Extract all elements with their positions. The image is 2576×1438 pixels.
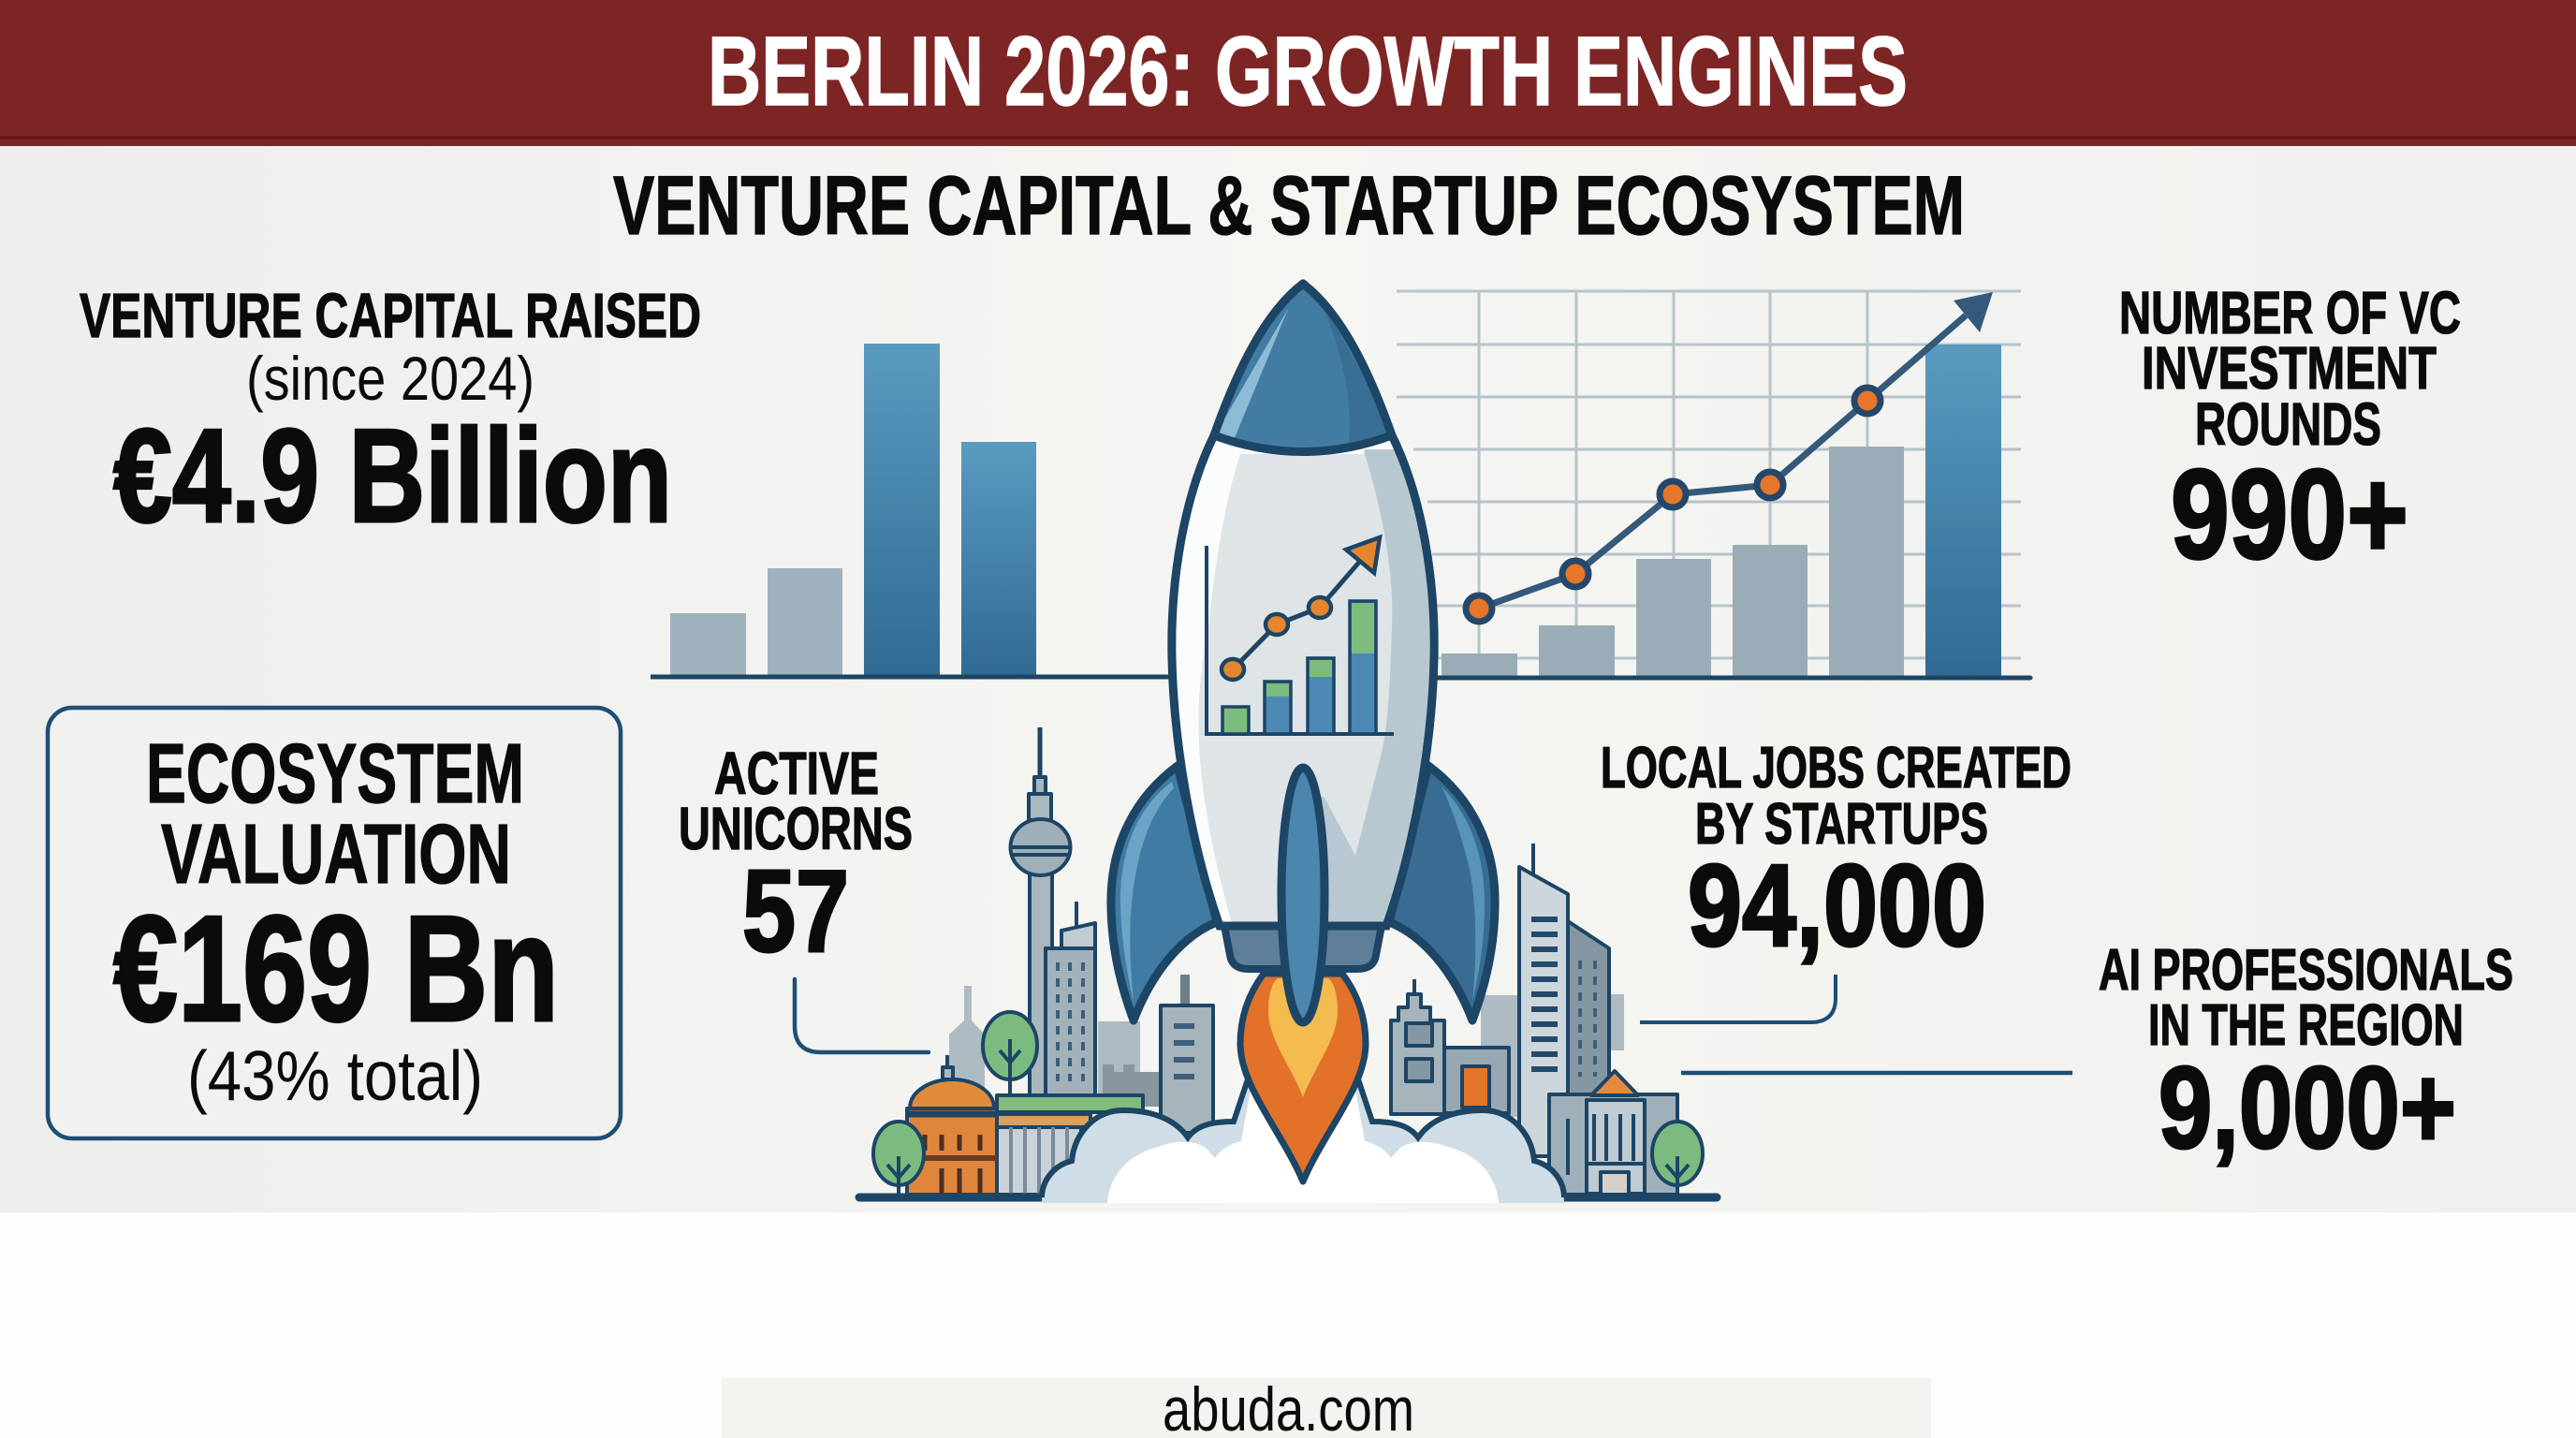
label: number of vc investment rounds: NUMBER OF VC [2119,279,2461,346]
title banner [0,0,2576,146]
right growth chart [1397,291,2030,678]
label: ai professionals in the region: IN THE REGION [2148,993,2464,1058]
connector: ai [1681,1071,2072,1075]
colonnade building [997,1095,1143,1195]
orange domed building [907,1055,997,1195]
rocket nose cone [1214,281,1404,451]
city skyline [859,727,1717,1197]
label: number of vc investment rounds: INVESTMENT [2142,334,2437,402]
label: venture capital raised: VENTURE CAPITAL RAISED [80,281,701,351]
stat: number of vc rounds [2119,279,2461,585]
tall right building [1519,844,1609,1156]
tree: right [1652,1122,1703,1197]
footer band [722,1374,1931,1438]
label: number of vc investment rounds [2119,279,2461,458]
value: 57: 57 [742,847,849,976]
chart bars [1442,345,2001,678]
rocket [1111,281,1495,1181]
panel: ecosystem valuation [48,708,621,1138]
value: 169 bn: €169 Bn [113,885,559,1053]
tree: lower left [873,1122,924,1197]
label: local jobs created by startups: LOCAL JOBS CREATED [1601,736,2071,800]
tv tower [1011,727,1071,1097]
value: 4.9 billion: €4.9 Billion [113,402,672,550]
subtitle: VENTURE CAPITAL & STARTUP ECOSYSTEM [613,158,1965,252]
label: active unicorns [679,740,913,862]
right low buildings [1391,979,1509,1114]
background silhouettes [949,986,1624,1117]
stat: ai professionals [2099,938,2513,1173]
label: local jobs created by startups: BY STARTUPS [1695,792,1988,857]
label: active unicorns: ACTIVE [714,740,879,807]
mini chart on rocket [1207,537,1394,734]
ground line [859,1193,1717,1202]
center fin [1281,768,1325,1022]
right fin [1389,766,1495,1020]
connector: unicorns [795,979,929,1052]
heading: ecosystem valuation [146,727,524,902]
heading: ecosystem valuation: VALUATION [161,808,511,902]
left fin [1111,766,1217,1020]
label: ai professionals in the region [2099,938,2513,1058]
stat: local jobs [1601,736,2071,971]
value: 94,000: 94,000 [1688,842,1986,971]
rocket flame [1240,974,1366,1181]
heading: ecosystem valuation: ECOSYSTEM [146,727,524,821]
note: 43 percent total: (43% total) [187,1036,483,1115]
engine base [1224,926,1382,969]
label: number of vc investment rounds: ROUNDS [2195,390,2381,458]
label: active unicorns: UNICORNS [679,795,913,862]
stat: active unicorns [679,740,913,976]
value: 9,000+: 9,000+ [2159,1044,2456,1173]
value: 990+: 990+ [2171,443,2408,585]
connector: jobs [1640,975,1836,1022]
tower-side buildings [1046,902,1095,1098]
tree: upper left [983,1012,1037,1097]
left mid building [1161,975,1213,1133]
exhaust clouds [1042,1058,1564,1203]
rocket body [1172,435,1442,936]
mini bars [1222,601,1376,734]
trend line with arrow [1466,292,1993,622]
label: local jobs created by startups [1601,736,2071,857]
title: BERLIN 2026: GROWTH ENGINES [708,17,1908,126]
classic building [1549,1071,1677,1195]
stat: venture capital raised [80,281,701,550]
left bar chart [651,344,1175,677]
note: since 2024: (since 2024) [246,344,534,413]
